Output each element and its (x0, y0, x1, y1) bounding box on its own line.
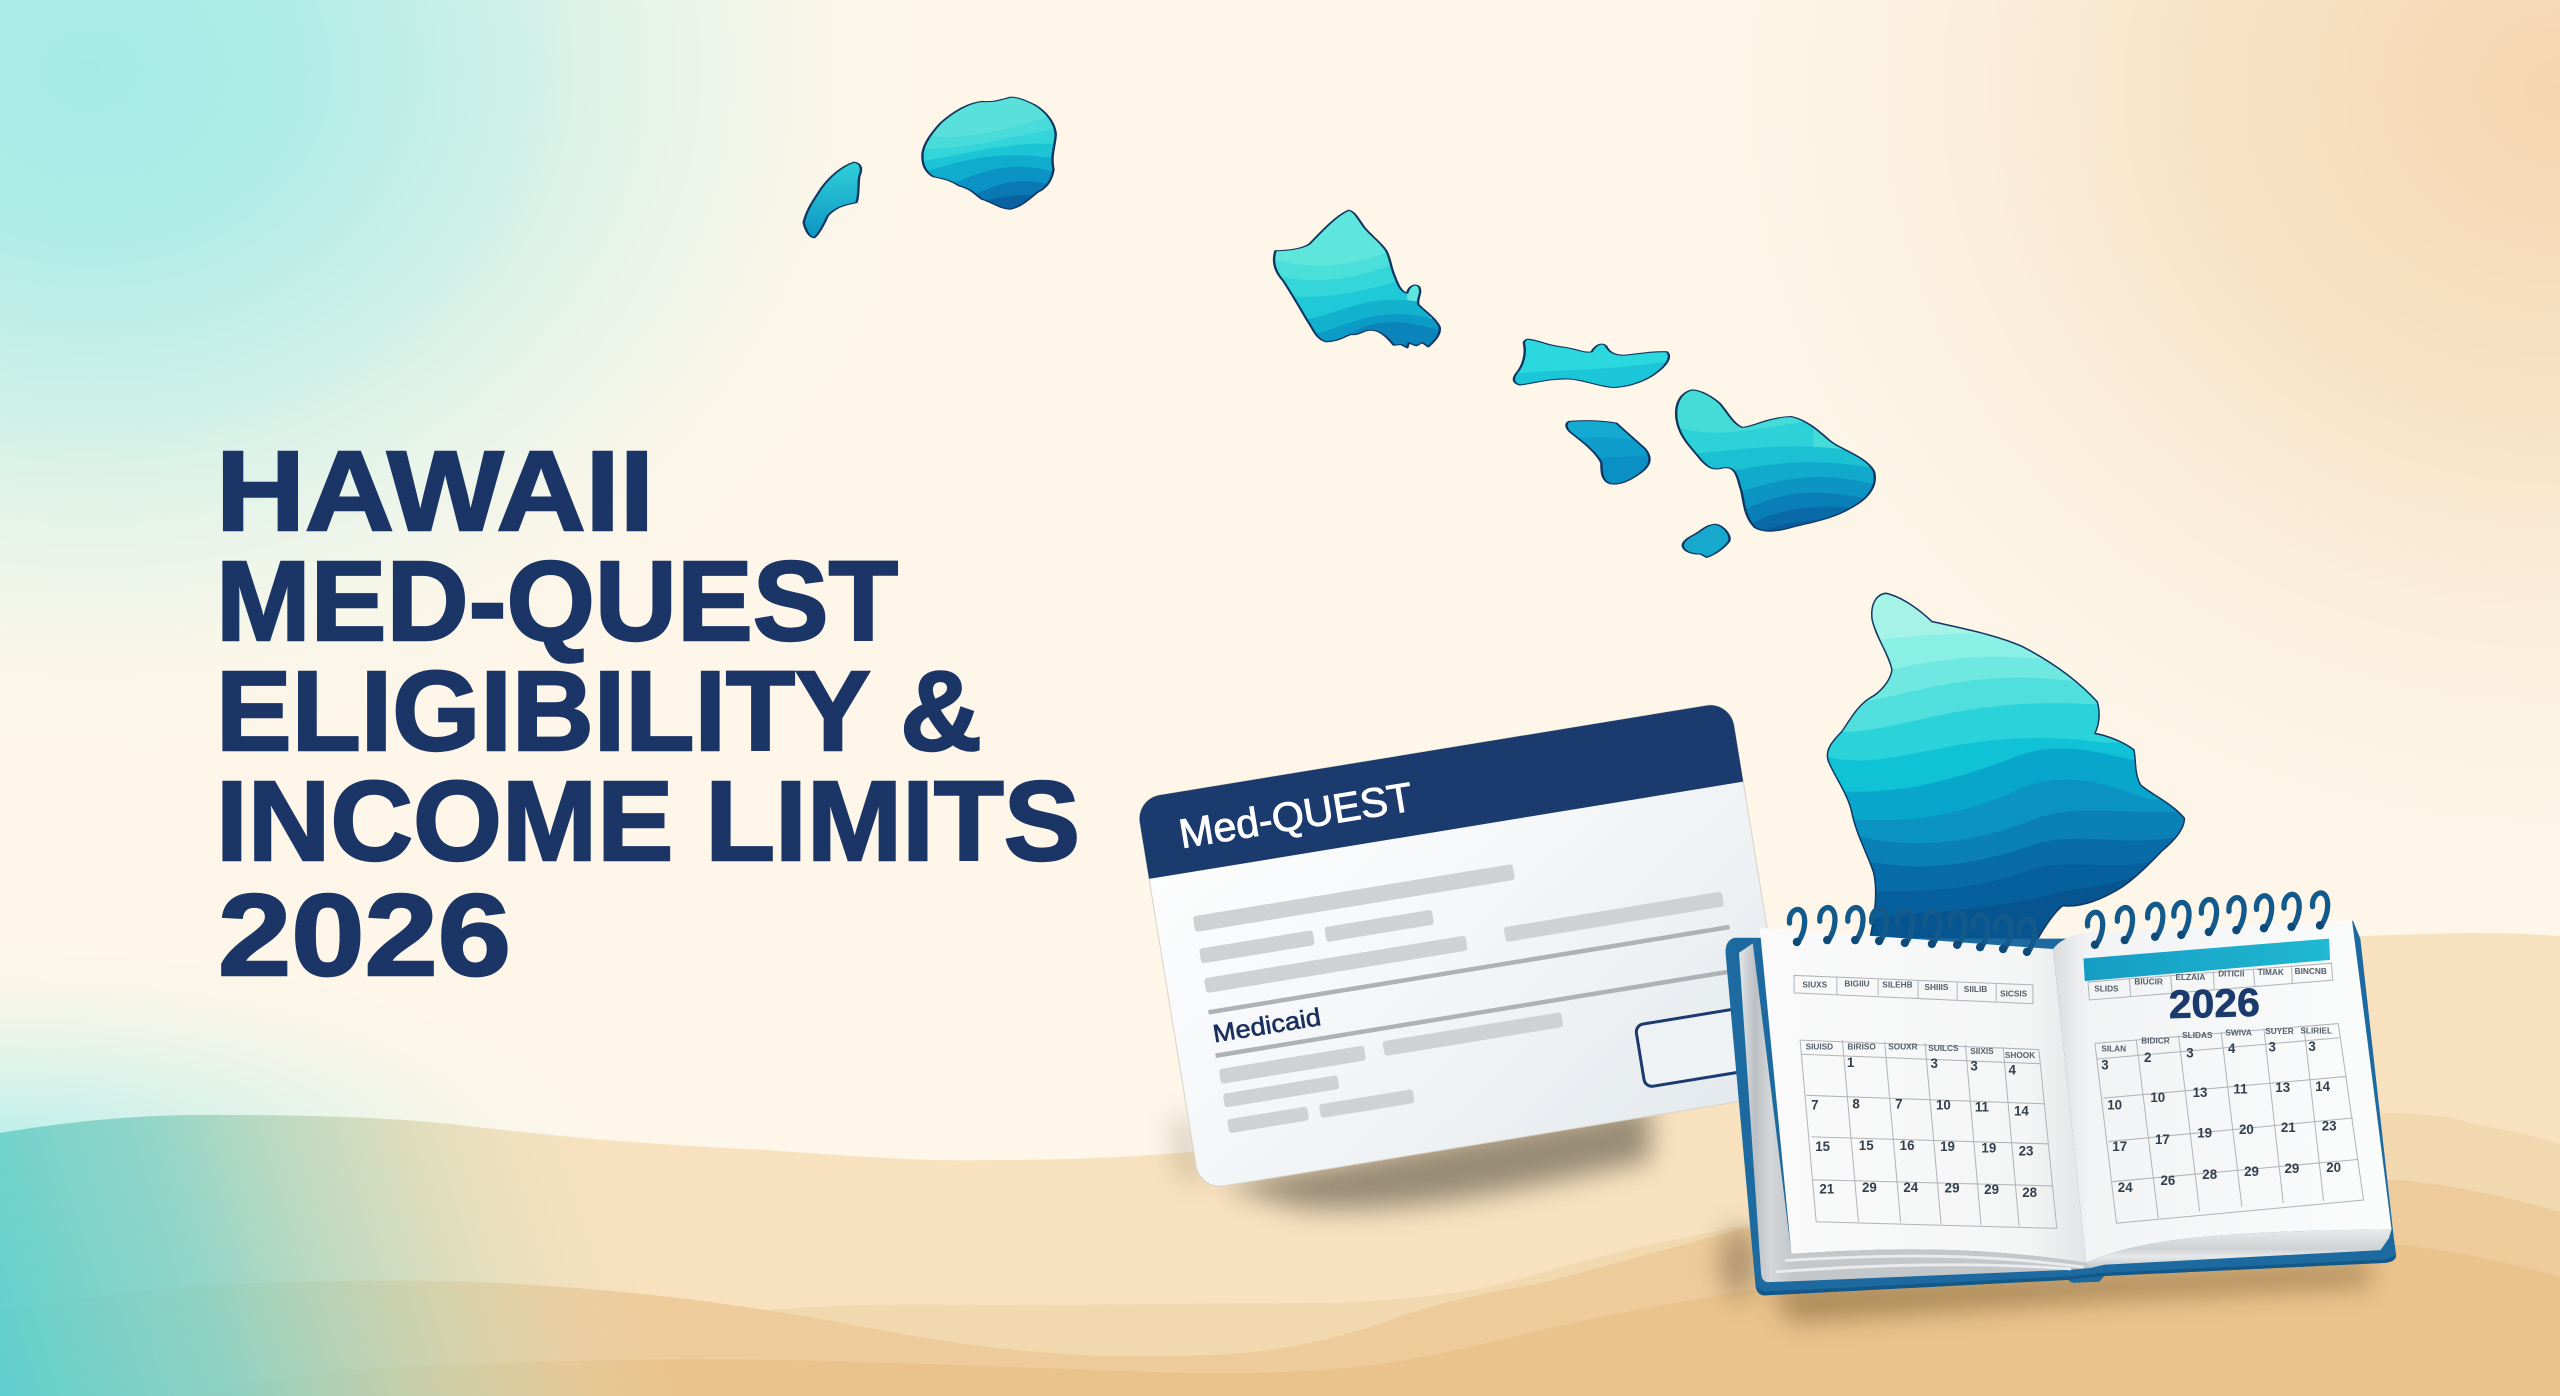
island: Kahoolawe (1683, 524, 1730, 557)
left page month grid: 19 (1940, 1139, 1955, 1154)
left page month grid (1800, 1040, 2057, 1228)
right page month grid: 3 (2268, 1040, 2276, 1055)
title: INCOME LIMITS (216, 758, 1080, 884)
title: ELIGIBILITY & (216, 648, 982, 774)
title: MED-QUEST (216, 538, 898, 664)
teal fade over left dunes (0, 1115, 700, 1396)
left page month grid: SUILCS (1928, 1043, 1959, 1053)
right page (2053, 921, 2392, 1263)
left page weekday strip: SIILIB (1964, 984, 1987, 994)
left page weekday strip (1794, 975, 2033, 1004)
right page month grid: SILAN (2101, 1044, 2126, 1054)
right page weekday strip: ELZAIA (2176, 972, 2205, 982)
right page month grid: 10 (2150, 1090, 2165, 1105)
right page stack (2086, 1229, 2392, 1268)
title (216, 428, 1080, 1000)
left page month grid: 8 (1852, 1096, 1860, 1111)
right page weekday strip (2088, 963, 2333, 1000)
right page month grid: 3 (2101, 1058, 2109, 1073)
island: Hawaii (Big Island) (1819, 589, 2196, 948)
left page weekday strip: SILEHB (1882, 979, 1913, 989)
right page weekday strip: SLIDS (2094, 984, 2119, 994)
right page month grid: 13 (2275, 1080, 2291, 1095)
left page month grid: 7 (1895, 1096, 1903, 1111)
right page weekday strip: BIUCIR (2134, 977, 2163, 987)
left page month grid: SIUISD (1806, 1042, 1833, 1052)
right page month grid: 2 (2144, 1050, 2151, 1065)
shadow left of card (1170, 1110, 1205, 1180)
left page month grid: 4 (2009, 1062, 2016, 1077)
right page month grid: 29 (2244, 1164, 2259, 1179)
island: Niihau (804, 162, 861, 238)
left page month grid: 14 (2014, 1103, 2029, 1118)
year 2026 on calendar: 2026 (2168, 981, 2260, 1027)
left page month grid: SIIXIS (1970, 1046, 1994, 1056)
left page month grid: 19 (1981, 1141, 1996, 1156)
island chain: Niihau to Kahoolawe (804, 93, 1889, 557)
card header band (1136, 702, 1743, 879)
card body (1136, 702, 1794, 1190)
right page month grid: 28 (2202, 1167, 2218, 1182)
right page blue header bar (2083, 939, 2330, 981)
right page month grid: 10 (2107, 1097, 2122, 1112)
right page month grid: 11 (2233, 1081, 2248, 1096)
island: Maui (1674, 389, 1876, 532)
shadow under Med-QUEST card (1220, 1105, 1650, 1209)
right page month grid: SWIVA (2225, 1027, 2252, 1038)
left page month grid: 3 (1970, 1058, 1978, 1074)
left page month grid: 15 (1859, 1138, 1874, 1153)
right page month grid: 21 (2281, 1120, 2296, 1135)
right page month grid: 3 (2186, 1045, 2194, 1060)
card title: Med-QUEST (1176, 774, 1416, 857)
right page month grid: 20 (2326, 1160, 2341, 1175)
right page month grid: 19 (2197, 1125, 2212, 1141)
left page month grid: 29 (1862, 1180, 1877, 1195)
left page (1760, 928, 2086, 1263)
right page month grid: 17 (2155, 1132, 2170, 1147)
left page month grid: 29 (1945, 1180, 1960, 1195)
right page weekday strip: DITICII (2218, 968, 2244, 979)
right page month grid: 20 (2239, 1122, 2254, 1137)
right page month grid: 3 (2308, 1039, 2316, 1054)
placeholder text bars (1193, 831, 1747, 1133)
book cover lower edge (1756, 1255, 2396, 1295)
right page month grid: SLIRIEL (2300, 1026, 2332, 1036)
left page month grid: BIRISO (1847, 1041, 1876, 1051)
island: Oahu (1272, 210, 1441, 348)
sand dunes (0, 933, 2560, 1396)
left page month grid: 11 (1975, 1100, 1989, 1115)
ring binding right (2087, 893, 2328, 949)
right page month grid: 24 (2118, 1180, 2133, 1195)
left page month grid: 28 (2022, 1185, 2038, 1200)
left page month grid: 10 (1936, 1097, 1951, 1112)
island: Molokai (1512, 338, 1670, 388)
left page stack (1739, 943, 2090, 1282)
left page month grid: SOUXR (1888, 1042, 1918, 1052)
Medicaid label: Medicaid (1211, 1003, 1323, 1048)
right page month grid: 23 (2322, 1118, 2337, 1134)
right page month grid: BIDICR (2141, 1036, 2170, 1046)
right page month grid: SLIDAS (2182, 1030, 2213, 1040)
left page month grid: 29 (1984, 1182, 1999, 1197)
right page month grid (2095, 1024, 2364, 1223)
right page month grid: 4 (2228, 1041, 2236, 1056)
right page month grid: SUYER (2265, 1026, 2294, 1036)
left page month grid: 3 (1930, 1056, 1938, 1071)
left page weekday strip: SHIIIS (1925, 982, 1949, 992)
left page weekday strip: BIGIIU (1844, 978, 1870, 989)
left stack page edges (1776, 1256, 2083, 1272)
left page month grid: 16 (1900, 1138, 1915, 1153)
title: 2026 (218, 870, 511, 1000)
left page month grid: 15 (1815, 1139, 1830, 1154)
Med-QUEST card (1136, 702, 1794, 1190)
right page month grid: 13 (2193, 1085, 2208, 1100)
left page month grid: 1 (1847, 1055, 1855, 1070)
left page month grid: SHOOK (2005, 1050, 2035, 1060)
island: Kauai (921, 96, 1057, 210)
right page weekday strip: TIMAK (2258, 967, 2284, 977)
book cover (1726, 921, 2396, 1295)
right page month grid: 29 (2284, 1161, 2299, 1176)
left page weekday strip: SICSIS (2000, 988, 2028, 998)
left page month grid: 7 (1811, 1097, 1819, 1112)
island: Lanai (1565, 420, 1651, 485)
left page month grid: 24 (1903, 1180, 1919, 1195)
ring binding left (1789, 908, 2035, 956)
open calendar book (1726, 893, 2396, 1295)
right page month grid: 26 (2161, 1173, 2176, 1188)
right page weekday strip: BINCNB (2295, 966, 2327, 976)
title: HAWAII (216, 428, 654, 554)
right page month grid: 17 (2112, 1139, 2127, 1154)
right page month grid: 14 (2315, 1079, 2331, 1094)
left page weekday strip: SIUXS (1802, 979, 1828, 989)
shadow under calendar (1770, 1262, 2370, 1322)
card outlined box (1635, 1008, 1754, 1087)
shadow left of calendar (1720, 1226, 1756, 1298)
left page month grid: 21 (1819, 1181, 1835, 1196)
left page month grid: 23 (2019, 1143, 2034, 1159)
